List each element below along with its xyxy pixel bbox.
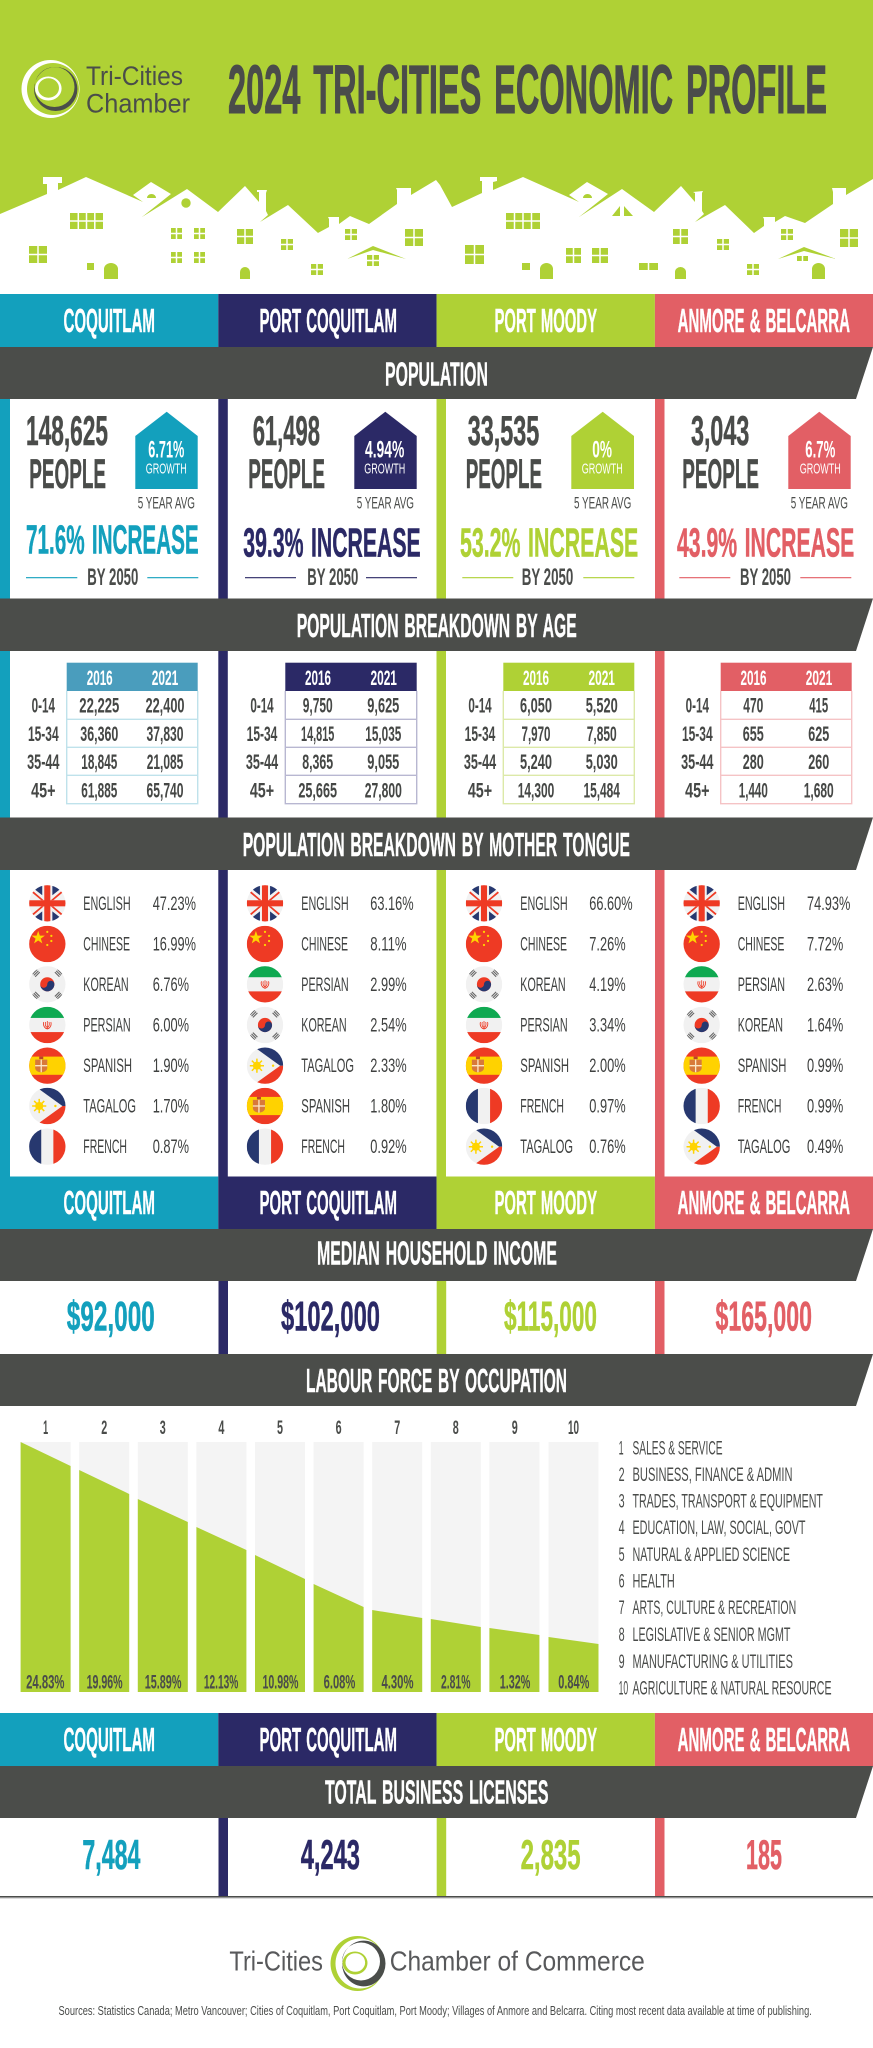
panel: mother tongue [0, 870, 850, 1176]
mother tongue: Anmore and Belcarra: TAGALOG [738, 1137, 790, 1158]
mother tongue: Port Moody: 3.34% [589, 1016, 626, 1036]
mother tongue: Port Moody: PERSIAN [520, 1016, 568, 1036]
age table: Port Moody [464, 663, 634, 804]
city header row 1: PORT COQUITLAM [260, 302, 397, 339]
mother tongue: Anmore and Belcarra: 2.63% [807, 975, 843, 996]
heading: population [0, 347, 873, 399]
mother tongue: Coquitlam: 1.90% [153, 1056, 189, 1077]
mother tongue: Port Coquitlam: 2.54% [370, 1016, 407, 1036]
age table: Port Moody: 5,520 [586, 695, 618, 718]
house skyline [0, 177, 873, 294]
footer logo [229, 1936, 645, 1991]
age table: Port Coquitlam: 2021 [370, 666, 397, 690]
age table: Anmore and Belcarra: 260 [808, 751, 829, 774]
population: Coquitlam [26, 407, 199, 591]
mother tongue: Port Moody: 2.00% [589, 1056, 626, 1077]
bar percentages: 1.32% [500, 1671, 530, 1693]
city header row 1: PORT MOODY [494, 302, 597, 339]
chamber logo: Tri-Cities [86, 61, 183, 91]
bar numbers: 8 [453, 1417, 459, 1439]
mother tongue: Port Coquitlam: ENGLISH [301, 894, 349, 915]
population: Anmore and Belcarra [677, 407, 854, 591]
population: Port Moody: BY 2050 [522, 564, 573, 591]
mother tongue: Port Coquitlam: PERSIAN [301, 975, 349, 996]
population: Port Moody: 5 YEAR AVG [574, 493, 631, 512]
mother tongue: Anmore and Belcarra: 0.99% [807, 1096, 843, 1118]
age table: Coquitlam: 22,400 [146, 695, 184, 718]
heading: total business licenses: TOTAL BUSINESS LICENSES [325, 1774, 548, 1810]
panel: income values: $92,000 [67, 1292, 155, 1340]
age table: Port Coquitlam: 25,665 [298, 779, 337, 802]
bar numbers: 5 [277, 1417, 283, 1439]
bar percentages: 10.98% [262, 1671, 298, 1693]
city header row 2: COQUITLAM [64, 1184, 155, 1221]
population: Coquitlam: BY 2050 [87, 564, 138, 591]
panel: business license values [0, 1818, 873, 1899]
flags: Anmore and Belcarra [684, 885, 720, 1165]
mother tongue: Port Coquitlam [247, 885, 414, 1165]
legend: occupations: SALES & SERVICE [632, 1438, 722, 1459]
city header row 3: PORT COQUITLAM [260, 1721, 397, 1758]
mother tongue: Port Moody: TAGALOG [520, 1137, 573, 1158]
age table: Port Moody: 0-14 [468, 695, 492, 718]
mother tongue: Port Moody: ENGLISH [520, 894, 568, 915]
mother tongue: Port Coquitlam: 0.92% [370, 1137, 407, 1158]
mother tongue: Coquitlam: SPANISH [83, 1056, 132, 1077]
header banner [0, 0, 873, 294]
legend: occupations: 3 [619, 1492, 625, 1513]
age table: Port Moody: 14,300 [518, 779, 554, 802]
panel: business license values: 2,835 [521, 1831, 581, 1878]
age table: Anmore and Belcarra: 1,680 [804, 779, 834, 802]
mother tongue: Port Moody: SPANISH [520, 1056, 569, 1077]
population: Anmore and Belcarra: 6.7% [805, 436, 835, 463]
bar numbers: 9 [512, 1417, 518, 1439]
mother tongue: Anmore and Belcarra: 0.49% [807, 1137, 843, 1158]
mother tongue: Port Coquitlam: SPANISH [301, 1096, 350, 1118]
mother tongue: Port Coquitlam: 2.99% [370, 975, 407, 996]
mother tongue: Port Moody: 7.26% [589, 934, 626, 956]
age table: Port Coquitlam: 9,625 [367, 695, 399, 718]
flags: Port Coquitlam [247, 885, 283, 1165]
age table: Coquitlam: 65,740 [146, 779, 184, 802]
mother tongue: Port Moody: 66.60% [589, 894, 633, 915]
age table: Coquitlam: 22,225 [79, 695, 119, 718]
bar percentages: 24.83% [26, 1671, 64, 1693]
heading: median household income: MEDIAN HOUSEHOLD INCOME [317, 1234, 557, 1272]
age table: Anmore and Belcarra: 280 [743, 751, 764, 774]
city header row 2: PORT MOODY [494, 1184, 597, 1221]
heading: median household income [0, 1229, 873, 1281]
population: Coquitlam: 5 YEAR AVG [138, 493, 195, 512]
bar percentages: 19.96% [87, 1671, 123, 1693]
bar numbers: 1 [43, 1417, 48, 1439]
bar percentages: 15.89% [145, 1671, 181, 1693]
mother tongue: Coquitlam: 16.99% [153, 934, 196, 956]
chamber logo [22, 60, 190, 118]
age table: Coquitlam [27, 663, 198, 804]
age table: Coquitlam: 2016 [87, 666, 113, 690]
age table: Anmore and Belcarra: 35-44 [681, 751, 714, 774]
age table: Port Coquitlam: 14,815 [301, 723, 335, 746]
mother tongue: Coquitlam: CHINESE [83, 934, 130, 956]
city header row 1: COQUITLAM [64, 302, 155, 339]
population: Port Coquitlam: 4.94% [365, 436, 404, 463]
age table: Port Coquitlam: 27,800 [365, 779, 402, 802]
population: Anmore and Belcarra: GROWTH [800, 460, 841, 477]
mother tongue: Anmore and Belcarra: 74.93% [807, 894, 850, 915]
mother tongue: Port Coquitlam: 2.33% [370, 1056, 407, 1077]
age table: Anmore and Belcarra: 470 [743, 695, 763, 718]
age table: Anmore and Belcarra: 415 [809, 695, 828, 718]
population: Port Moody: PEOPLE [466, 450, 542, 497]
mother tongue: Port Coquitlam: FRENCH [301, 1137, 345, 1158]
age table: Coquitlam: 0-14 [32, 695, 55, 718]
bar percentages [26, 1671, 589, 1693]
mother tongue: Port Coquitlam: 8.11% [370, 934, 407, 956]
footer logo: Tri-Cities [229, 1946, 323, 1977]
heading: population by age [0, 598, 873, 651]
mother tongue: Coquitlam: ENGLISH [83, 894, 131, 915]
age table: Port Moody: 15,484 [583, 779, 620, 802]
chart: labour force bars [21, 1417, 599, 1693]
mother tongue: Port Coquitlam: 63.16% [370, 894, 414, 915]
city header row 2: PORT COQUITLAM [260, 1184, 397, 1221]
population: Coquitlam: GROWTH [146, 460, 187, 477]
age table: Port Coquitlam: 35-44 [246, 751, 278, 774]
age table: Coquitlam: 18,845 [81, 751, 117, 774]
mother tongue: Port Moody: 0.76% [589, 1137, 626, 1158]
mother tongue: Anmore and Belcarra: ENGLISH [738, 894, 785, 915]
population: Coquitlam: 71.6% INCREASE [26, 516, 199, 562]
bar percentages: 6.08% [324, 1671, 355, 1693]
population: Coquitlam: PEOPLE [29, 450, 106, 497]
panel: income values: $115,000 [504, 1292, 597, 1340]
age table: Port Coquitlam: 15,035 [365, 723, 401, 746]
panel: business license values: 7,484 [82, 1831, 141, 1878]
bar numbers: 7 [394, 1417, 400, 1439]
bar percentages: 4.30% [382, 1671, 414, 1693]
mother tongue: Anmore and Belcarra: 0.99% [807, 1056, 843, 1077]
age table: Port Coquitlam: 9,055 [367, 751, 399, 774]
population: Anmore and Belcarra: PEOPLE [682, 450, 759, 497]
legend: occupations: 8 [619, 1625, 625, 1646]
age table: Port Moody: 2016 [523, 666, 549, 690]
age table: Anmore and Belcarra: 1,440 [739, 779, 768, 802]
age table: Port Moody: 5,240 [520, 751, 552, 774]
age table: Coquitlam: 2021 [152, 666, 178, 690]
population: Port Moody: 53.2% INCREASE [460, 520, 638, 566]
age table: Anmore and Belcarra: 45+ [685, 779, 709, 802]
population: Port Coquitlam: PEOPLE [248, 450, 325, 497]
population: Port Moody: 0% [592, 436, 612, 463]
population: Port Coquitlam: GROWTH [364, 460, 405, 477]
mother tongue: Port Moody [466, 885, 633, 1165]
mother tongue: Anmore and Belcarra: 1.64% [807, 1016, 843, 1036]
age table: Coquitlam: 21,085 [147, 751, 183, 774]
mother tongue: Port Coquitlam: 1.80% [370, 1096, 407, 1118]
population: Anmore and Belcarra: 3,043 [691, 407, 749, 454]
age table: Port Coquitlam: 2016 [305, 666, 331, 690]
mother tongue: Anmore and Belcarra [684, 885, 850, 1165]
mother tongue: Coquitlam: PERSIAN [83, 1016, 131, 1036]
legend: occupations: 2 [619, 1465, 625, 1486]
mother tongue: Port Moody: KOREAN [520, 975, 566, 996]
mother tongue: Port Moody: CHINESE [520, 934, 567, 956]
mother tongue: Anmore and Belcarra: KOREAN [738, 1016, 783, 1036]
mother tongue: Coquitlam: 6.00% [153, 1016, 189, 1036]
age table: Port Moody: 35-44 [464, 751, 496, 774]
bar numbers [43, 1417, 579, 1439]
mother tongue: Coquitlam: 1.70% [153, 1096, 189, 1118]
legend: occupations: 5 [619, 1545, 625, 1566]
city header row 3 [0, 1713, 873, 1766]
age table: Anmore and Belcarra: 15-34 [682, 723, 713, 746]
heading: total business licenses [0, 1766, 873, 1818]
age table: Port Moody: 45+ [468, 779, 492, 802]
age table: Anmore and Belcarra: 0-14 [686, 695, 709, 718]
heading: labour force: LABOUR FORCE BY OCCUPATION [306, 1362, 567, 1399]
population: Port Coquitlam: 61,498 [253, 407, 320, 454]
bar percentages: 2.81% [441, 1671, 470, 1693]
bar percentages: 12.13% [204, 1671, 238, 1693]
legend: occupations [619, 1438, 832, 1699]
panel: age tables [0, 651, 852, 818]
age table: Port Coquitlam: 8,365 [302, 751, 333, 774]
age table: Port Coquitlam: 0-14 [250, 695, 274, 718]
age table: Coquitlam: 36,360 [80, 723, 118, 746]
population: Port Moody: GROWTH [582, 460, 623, 477]
legend: occupations: 10 [619, 1678, 628, 1699]
flags: Coquitlam [29, 885, 66, 1165]
panel: business license values: 185 [746, 1831, 782, 1878]
mother tongue: Port Coquitlam: KOREAN [301, 1016, 347, 1036]
panel: income values [67, 1281, 812, 1354]
city header row 3: PORT MOODY [494, 1721, 597, 1758]
age table: Port Moody: 5,030 [586, 751, 618, 774]
population: Port Coquitlam: BY 2050 [307, 564, 358, 591]
population: Coquitlam: 148,625 [26, 407, 108, 454]
age table: Port Coquitlam: 15-34 [247, 723, 278, 746]
mother tongue: Port Moody: 4.19% [589, 975, 626, 996]
mother tongue: Anmore and Belcarra: FRENCH [738, 1096, 781, 1118]
bar numbers: 3 [160, 1417, 166, 1439]
mother tongue: Port Moody: FRENCH [520, 1096, 564, 1118]
mother tongue: Anmore and Belcarra: SPANISH [738, 1056, 786, 1077]
age table: Anmore and Belcarra: 625 [808, 723, 829, 746]
mother tongue: Anmore and Belcarra: PERSIAN [738, 975, 785, 996]
bar numbers: 4 [218, 1417, 224, 1439]
population: Coquitlam: 6.71% [148, 436, 184, 463]
age table: Coquitlam: 45+ [31, 779, 55, 802]
mother tongue: Port Moody: 0.97% [589, 1096, 626, 1118]
population: Port Moody: 33,535 [468, 407, 539, 454]
population: Port Coquitlam: 39.3% INCREASE [243, 520, 421, 566]
city header row 1 [0, 294, 873, 347]
legend: occupations: 4 [619, 1518, 625, 1539]
city header row 2 [0, 1176, 873, 1230]
age table: Port Moody: 7,850 [587, 723, 617, 746]
mother tongue: Port Coquitlam: TAGALOG [301, 1056, 354, 1077]
age table: Port Moody: 2021 [588, 666, 615, 690]
heading: labour force [0, 1354, 873, 1406]
mother tongue: Port Coquitlam: CHINESE [301, 934, 348, 956]
legend: occupations: 1 [619, 1438, 624, 1459]
heading: population: POPULATION [385, 356, 488, 392]
age table: Anmore and Belcarra [681, 663, 852, 804]
panel: business license values: 4,243 [301, 1831, 360, 1878]
mother tongue: Anmore and Belcarra: 7.72% [807, 934, 843, 956]
bar numbers: 10 [568, 1417, 579, 1439]
mother tongue: Coquitlam: KOREAN [83, 975, 129, 996]
age table: Coquitlam: 35-44 [27, 751, 60, 774]
age table: Coquitlam: 61,885 [81, 779, 117, 802]
panel: income values: $102,000 [281, 1292, 380, 1340]
legend: occupations: 7 [619, 1598, 625, 1619]
age table: Anmore and Belcarra: 2016 [740, 666, 767, 690]
legend: occupations: 9 [619, 1652, 625, 1673]
heading: mother tongue [0, 818, 873, 870]
age table: Port Coquitlam: 45+ [250, 779, 274, 802]
bar numbers: 6 [336, 1417, 342, 1439]
age table: Coquitlam: 37,830 [146, 723, 184, 746]
age table: Anmore and Belcarra: 2021 [806, 666, 832, 690]
mother tongue: Coquitlam: FRENCH [83, 1137, 127, 1158]
legend: occupations: HEALTH [632, 1572, 675, 1593]
mother tongue: Coquitlam: 47.23% [153, 894, 196, 915]
flags: Port Moody [466, 885, 502, 1165]
population: Anmore and Belcarra: BY 2050 [740, 564, 791, 591]
age table: Port Moody: 7,970 [522, 723, 550, 746]
age table: Port Coquitlam: 9,750 [303, 695, 333, 718]
city header row 3: COQUITLAM [64, 1721, 155, 1758]
population: Port Moody [460, 407, 638, 591]
footer logo: Chamber of Commerce [390, 1946, 645, 1977]
bar percentages: 0.84% [558, 1671, 589, 1693]
mother tongue: Coquitlam [29, 885, 196, 1165]
age table: Port Moody: 15-34 [465, 723, 496, 746]
chamber logo: Chamber [86, 88, 190, 118]
mother tongue: Coquitlam: 0.87% [153, 1137, 189, 1158]
mother tongue: Coquitlam: TAGALOG [83, 1096, 136, 1118]
bar numbers: 2 [101, 1417, 107, 1439]
age table: Coquitlam: 15-34 [28, 723, 59, 746]
mother tongue: Coquitlam: 6.76% [153, 975, 189, 996]
age table: Port Coquitlam [246, 663, 417, 804]
age table: Anmore and Belcarra: 655 [743, 723, 764, 746]
population: Port Coquitlam [243, 407, 421, 591]
age table: Port Moody: 6,050 [520, 695, 552, 718]
heading: population by age: POPULATION BREAKDOWN BY AGE [297, 607, 577, 644]
mother tongue: Anmore and Belcarra: CHINESE [738, 934, 784, 956]
population: Port Coquitlam: 5 YEAR AVG [357, 493, 414, 512]
panel: population stats [0, 399, 854, 598]
legend: occupations: 6 [619, 1572, 625, 1593]
